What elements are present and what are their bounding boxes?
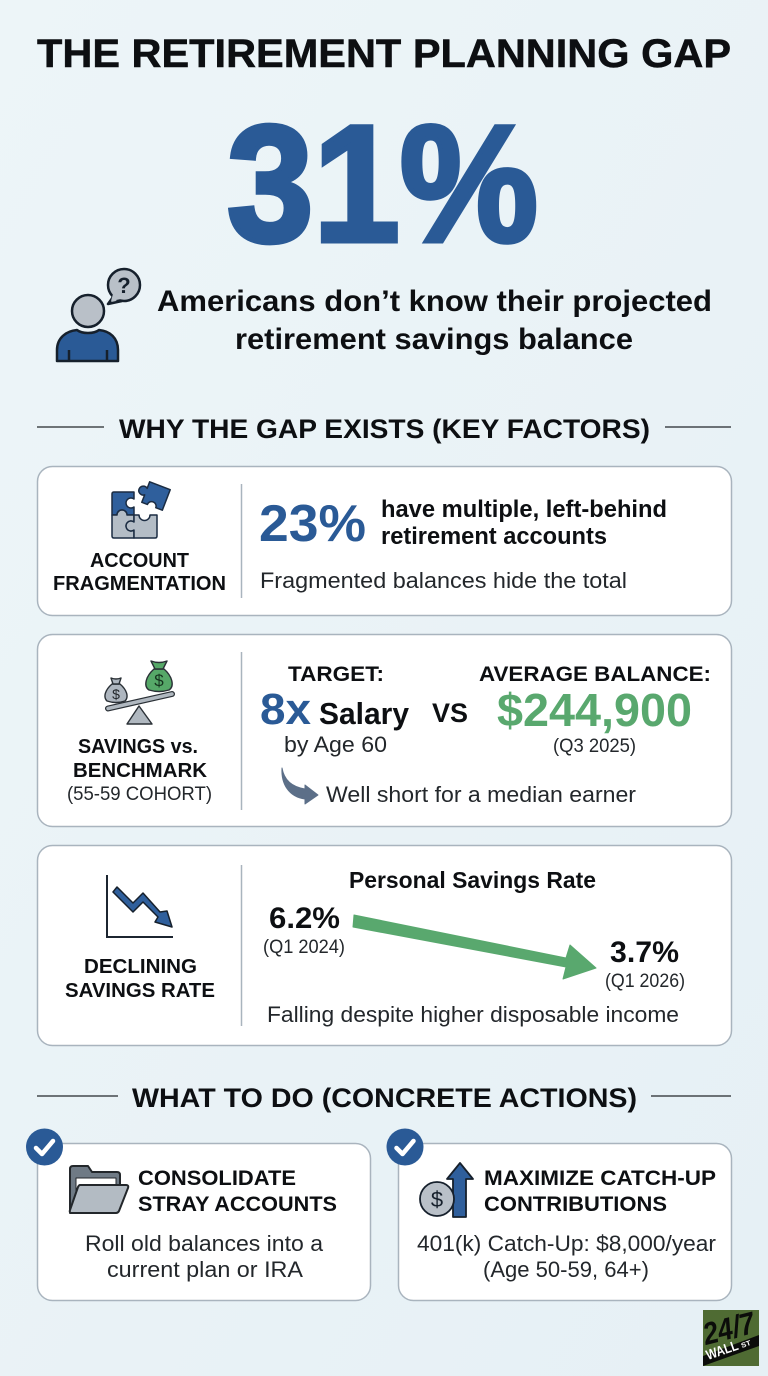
icon: curved arrow bbox=[282, 768, 318, 804]
logo: 24/7 Wall St: ST bbox=[740, 1340, 753, 1350]
big statistic: 31%: 31% bbox=[227, 92, 538, 277]
logo: 24/7 Wall St bbox=[698, 1305, 760, 1366]
label: account fragmentation: ACCOUNT bbox=[90, 550, 189, 572]
panel: savings vs benchmark bbox=[38, 634, 732, 826]
label: declining savings rate bbox=[65, 956, 215, 1002]
panel: account fragmentation bbox=[38, 466, 732, 616]
action text: catch-up bbox=[417, 1231, 716, 1282]
icon: puzzle pieces bbox=[112, 479, 170, 538]
label: savings vs benchmark bbox=[67, 736, 212, 805]
logo: 24/7 Wall St: 24/7 bbox=[698, 1305, 760, 1352]
target: 8x salary: Salary bbox=[319, 696, 410, 731]
subtitle: Americans don’t know their projected bbox=[157, 285, 712, 318]
icon: coin and up arrow: $ bbox=[431, 1187, 443, 1212]
label: savings vs benchmark: BENCHMARK bbox=[73, 760, 208, 782]
target: 8x salary: 8x bbox=[260, 685, 312, 734]
icon: balance scale with money bags: $ bbox=[112, 686, 120, 702]
average balance: $244,900: (Q3 2025) bbox=[553, 736, 636, 757]
action heading: consolidate: STRAY ACCOUNTS bbox=[138, 1193, 337, 1216]
label: account fragmentation bbox=[53, 550, 226, 595]
title: THE RETIREMENT PLANNING GAP bbox=[37, 32, 731, 76]
action text: consolidate: Roll old balances into a bbox=[85, 1231, 324, 1256]
start value: 6.2% bbox=[263, 902, 345, 958]
subtitle bbox=[157, 285, 712, 356]
action heading: catch-up: MAXIMIZE CATCH-UP bbox=[484, 1167, 716, 1190]
target: 8x salary bbox=[260, 663, 410, 757]
icon: declining chart bbox=[107, 875, 173, 937]
action heading: consolidate: CONSOLIDATE bbox=[138, 1167, 296, 1190]
note: falling despite income: Falling despite higher disposable income bbox=[267, 1002, 679, 1027]
panel: consolidate accounts bbox=[26, 1128, 370, 1300]
label: declining savings rate: SAVINGS RATE bbox=[65, 980, 215, 1002]
heading: what to do: WHAT TO DO (CONCRETE ACTIONS) bbox=[132, 1083, 637, 1113]
icon: check badge bbox=[386, 1128, 424, 1166]
chart heading: Personal Savings Rate bbox=[349, 867, 596, 893]
label: declining savings rate: DECLINING bbox=[84, 956, 197, 978]
average balance: $244,900 bbox=[479, 663, 711, 757]
action text: consolidate: current plan or IRA bbox=[107, 1257, 303, 1282]
icon: coin and up arrow bbox=[420, 1163, 473, 1217]
label: account fragmentation: FRAGMENTATION bbox=[53, 573, 226, 595]
target: 8x salary: TARGET: bbox=[288, 663, 384, 686]
note: fragmented balances: Fragmented balances hide the total bbox=[260, 568, 627, 593]
statistic: 23%: 23% bbox=[259, 495, 366, 553]
average balance: $244,900: $244,900 bbox=[497, 684, 692, 736]
start value: 6.2%: 6.2% bbox=[269, 902, 340, 935]
icon: balance scale with money bags: $ bbox=[154, 671, 164, 690]
label: savings vs benchmark: (55-59 COHORT) bbox=[67, 784, 212, 805]
start value: 6.2%: (Q1 2024) bbox=[263, 937, 345, 958]
action text: catch-up: 401(k) Catch-Up: $8,000/year bbox=[417, 1231, 716, 1256]
icon: balance scale with money bags bbox=[105, 661, 172, 724]
action heading: catch-up bbox=[484, 1167, 716, 1216]
icon: check badge bbox=[26, 1128, 63, 1166]
text: left-behind accounts: retirement accounts bbox=[381, 523, 607, 550]
text: left-behind accounts: have multiple, left-behind bbox=[381, 496, 667, 523]
average balance: $244,900: AVERAGE BALANCE: bbox=[479, 663, 711, 686]
end value: 3.7% bbox=[605, 936, 685, 992]
action text: consolidate bbox=[85, 1231, 324, 1282]
panel: declining savings rate bbox=[38, 846, 732, 1046]
action heading: catch-up: CONTRIBUTIONS bbox=[484, 1193, 667, 1216]
end value: 3.7%: (Q1 2026) bbox=[605, 971, 685, 992]
label: savings vs benchmark: SAVINGS vs. bbox=[78, 736, 198, 758]
logo: 24/7 Wall St: WALL bbox=[704, 1337, 741, 1363]
note: well short: Well short for a median earner bbox=[326, 782, 636, 807]
panel: catch-up contributions bbox=[386, 1128, 732, 1300]
action text: catch-up: (Age 50-59, 64+) bbox=[483, 1257, 649, 1282]
icon: folder bbox=[70, 1166, 128, 1213]
arrow: falling rate bbox=[353, 915, 596, 979]
end value: 3.7%: 3.7% bbox=[610, 936, 679, 969]
action heading: consolidate bbox=[138, 1167, 337, 1216]
target: 8x salary: by Age 60 bbox=[284, 732, 387, 757]
icon: person with question bubble: ? bbox=[117, 273, 131, 298]
icon: person with question bubble bbox=[57, 269, 140, 361]
versus label: VS bbox=[432, 698, 468, 728]
subtitle: retirement savings balance bbox=[235, 323, 633, 356]
heading: why the gap exists: WHY THE GAP EXISTS (KEY FACTORS) bbox=[119, 414, 650, 444]
text: left-behind accounts bbox=[381, 496, 667, 550]
